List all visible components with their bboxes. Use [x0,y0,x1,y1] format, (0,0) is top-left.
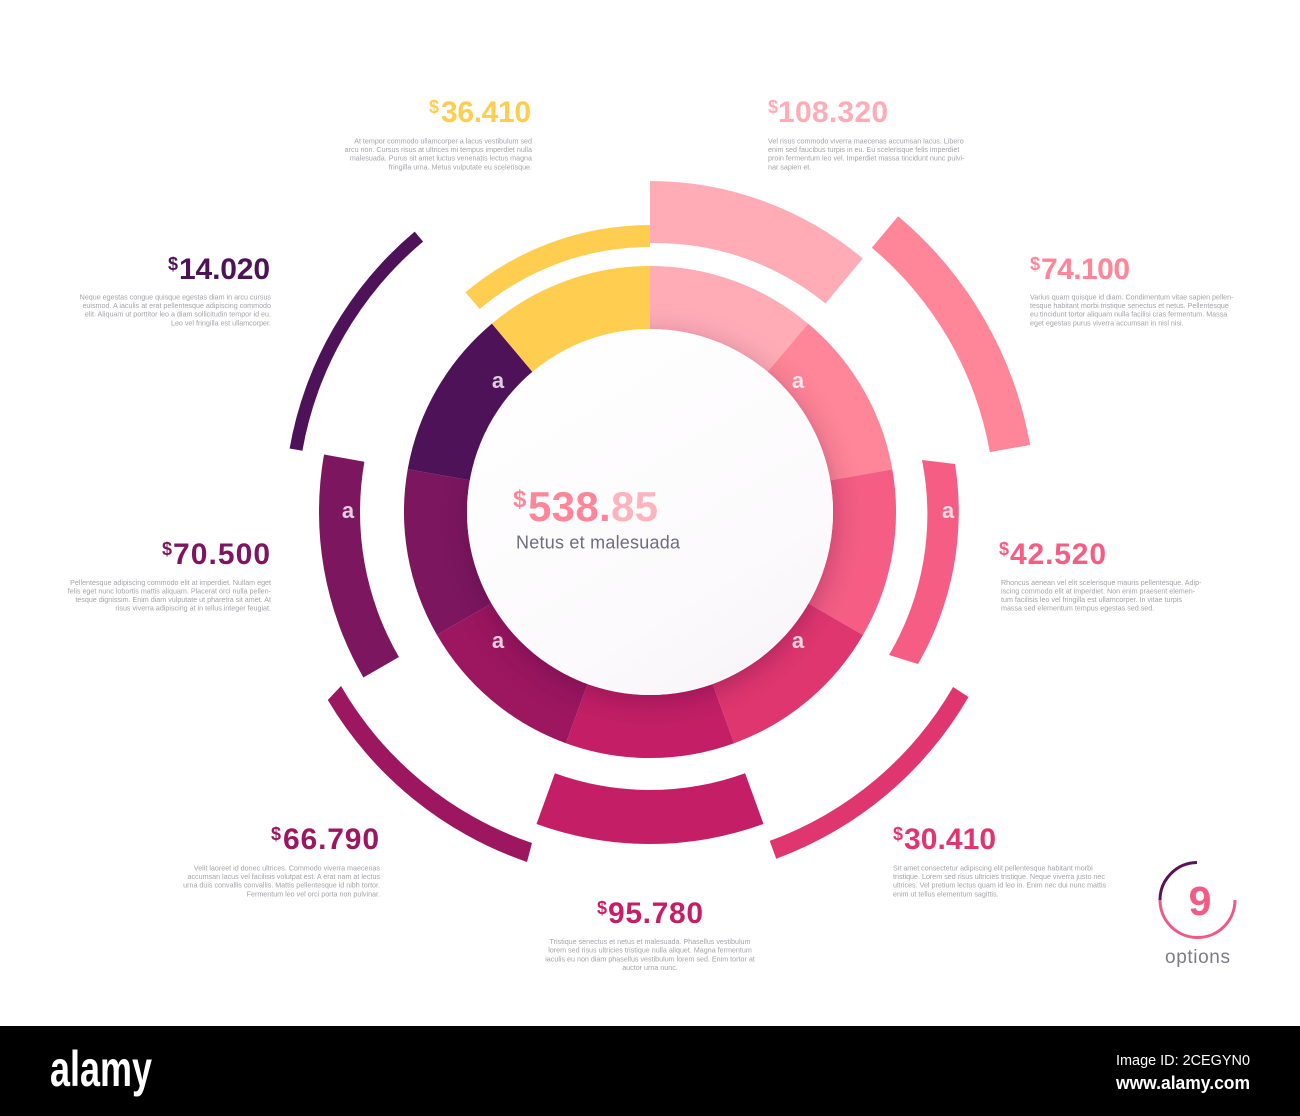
outer arc: 70.500 [319,454,399,678]
outer arc: 42.520 [889,460,959,664]
callout: 42.520: 42.520 [1010,538,1106,571]
callout: 95.780: $ [597,898,607,918]
outer arc: 14.020 [290,232,423,451]
badge ring pink arc [1160,900,1235,938]
outer arc: 36.410 [466,225,650,309]
callout: 42.520: Rhoncus aenean vel elit scelerisque mauris pellentesque. Adip- [1001,579,1202,587]
watermark marks [342,368,955,653]
total dollar sign: $ [513,486,527,513]
outer arc: 95.780 [536,773,764,844]
callout: 30.410: Sit amet consectetur adipiscing elit pellentesque habitant morbi [893,864,1093,872]
total caption: Netus et malesuada [516,532,681,552]
callout: 70.500: risus viverra adipiscing at in tellus integer feugiat. [115,605,271,613]
callout: 30.410: $ [893,824,903,844]
callout: 14.020 [80,253,271,327]
watermark marks: a [492,628,505,653]
footer bar [0,1026,1300,1116]
callout: 66.790: Fermentum leo vel orci porta non pulvinar. [247,890,380,898]
outer arc: 30.410 [770,687,968,859]
callout: 70.500: tesque dignissim. Enim diam vulputate ut pharetra sit amet. At [75,596,271,604]
callout: 30.410: enim ut tellus elementum sagittis. [893,890,999,898]
outer arc: 108.320 [650,181,863,304]
callout: 36.410: 36.410 [441,96,531,129]
callout: 108.320: $ [768,97,778,117]
callout: 108.320: enim sed faucibus turpis in eu. Eu scelerisque felis imperdiet [768,146,959,154]
callout: 108.320: Vel risus commodo viverra maecenas accumsan lacus. Libero [768,138,964,146]
callout: 70.500: felis eget nunc lobortis mattis aliquam. Placerat orci nulla pellen- [68,588,272,596]
callout: 70.500 [68,538,272,613]
ring segment: 70.500 [404,469,650,635]
callout: 66.790: 66.790 [283,823,379,856]
watermark marks: a [792,628,805,653]
callout: 36.410: fringilla urna. Metus vulputate eu scelerisque. [389,163,532,171]
callout: 66.790: Velit laoreet id donec ultrices. Commodo viverra maecenas [194,864,380,872]
callout: 42.520: $ [999,539,1009,559]
callout: 95.780: lorem sed risus ultricies tristique nulla aliquet. Magna fermentum [548,947,752,955]
callout: 70.500: $ [162,539,172,559]
callout: 36.410: arcu non. Cursus risus at ultrices mi tempus imperdiet nulla [345,146,532,154]
callout: 66.790: $ [271,824,281,844]
callout: 14.020: Neque egestas congue quisque egestas diam in arcu cursus [80,294,271,302]
callout: 36.410: malesuada. Purus sit amet luctus venenatis lectus magna [350,155,532,163]
outer arcs [290,181,1030,862]
watermark marks: a [792,368,805,393]
callout: 95.780: 95.780 [608,897,703,930]
callout: 74.100: eget egestas purus viverra accumsan in nisl nisi. [1030,319,1184,327]
center circle [467,329,833,695]
ring segment: 42.520 [650,469,896,635]
watermark marks: a [942,498,955,523]
callout: 66.790: accumsan lacus vel facilisis volutpat est. A erat nam at lectus [188,873,380,881]
callout: 30.410 [893,823,1107,898]
callout: 42.520: massa sed elementum tempus egestas sed sed. [1001,605,1154,613]
callout: 108.320: 108.320 [778,96,888,129]
callout: 14.020: 14.020 [179,253,270,286]
callout: 14.020: Leo vel fringilla est ullamcorper. [171,319,271,327]
callout: 74.100: eu tincidunt tortor aliquam nulla facilisi cras fermentum. Massa [1030,311,1227,319]
footer url: www.alamy.com [1115,1073,1250,1093]
ring segment: 95.780 [566,512,734,758]
callout: 42.520: iscing commodo elit at imperdiet. Non enim praesent elemen- [1001,588,1196,596]
callout: 95.780: iaculis eu non diam phasellus vestibulum lorem sed. Enim tortor at [545,955,755,963]
callout: 95.780: Tristique senectus et netus et malesuada. Phasellus vestibulum [550,938,751,946]
center total [513,483,681,552]
callout: 36.410: $ [429,97,439,117]
watermark marks: a [492,368,505,393]
badge number: 9 [1189,878,1211,924]
ring segment: 66.790 [437,512,650,743]
ring segment: 36.410 [492,266,650,512]
footer image id: Image ID: 2CEGYN0 [1116,1052,1250,1069]
ring segment: 14.020 [408,324,650,512]
callout: 74.100: Varius quam quisque id diam. Condimentum vitae sapien pellen- [1030,294,1234,302]
callout: 66.790 [183,823,380,898]
callout: 14.020: elit. Aliquam ut porttitor leo a diam sollicitudin tempor id eu. [85,311,271,319]
options badge [1160,862,1235,968]
badge label: options [1165,947,1230,968]
callout: 74.100 [1030,253,1234,327]
callout: 42.520: tum facilisis leo vel fringilla est ullamcorper. In vitae turpis [1001,596,1182,604]
callout: 14.020: euismod. A iaculis at erat pellentesque adipiscing commodo [82,302,271,310]
callout: 30.410: tristique. Lorem sed risus ultricies tristique. Neque viverra justo nec [893,873,1105,881]
outer arc: 74.100 [872,216,1030,452]
callout: 70.500: Pellentesque adipiscing commodo elit at imperdiet. Nullam eget [70,579,271,587]
callout: 42.520 [999,538,1202,613]
callout: 30.410: 30.410 [904,823,996,856]
footer logo: alamy [50,1041,152,1097]
callout: 36.410: At tempor commodo ullamcorper a lacus vestibulum sed [354,138,532,146]
watermark marks: a [342,498,355,523]
badge ring dark arc [1160,862,1197,900]
callout: 95.780 [545,897,755,972]
center circle shadow [467,329,833,695]
ring segment: 74.100 [650,324,892,512]
outer arc: 66.790 [328,686,532,862]
callout: 108.320: nar sapien et. [768,163,811,171]
callout: 36.410 [345,96,532,171]
inner donut ring [404,266,896,758]
callout: 74.100: 74.100 [1041,253,1130,286]
callout: 66.790: urna duis convallis convallis. Mattis pellentesque id nibh tortor. [183,882,380,890]
callout: 30.410: ultrices. Vel pretium lectus quam id leo in. Enim nec dui nunc mattis [893,882,1107,890]
total value: 538.85 [528,483,658,530]
callout: 70.500: 70.500 [173,538,270,571]
ring segment: 30.410 [650,512,863,743]
callout: 108.320 [768,96,965,171]
callout: 95.780: auctor urna nunc. [622,964,678,972]
callout: 14.020: $ [168,254,178,274]
ring segment: 108.320 [650,266,808,512]
callout: 74.100: tesque habitant morbi tristique senectus et netus. Pellentesque [1030,302,1229,310]
callout: 108.320: proin fermentum leo vel. Imperdiet massa tincidunt nunc pulvi- [768,155,965,163]
callout: 74.100: $ [1030,254,1040,274]
